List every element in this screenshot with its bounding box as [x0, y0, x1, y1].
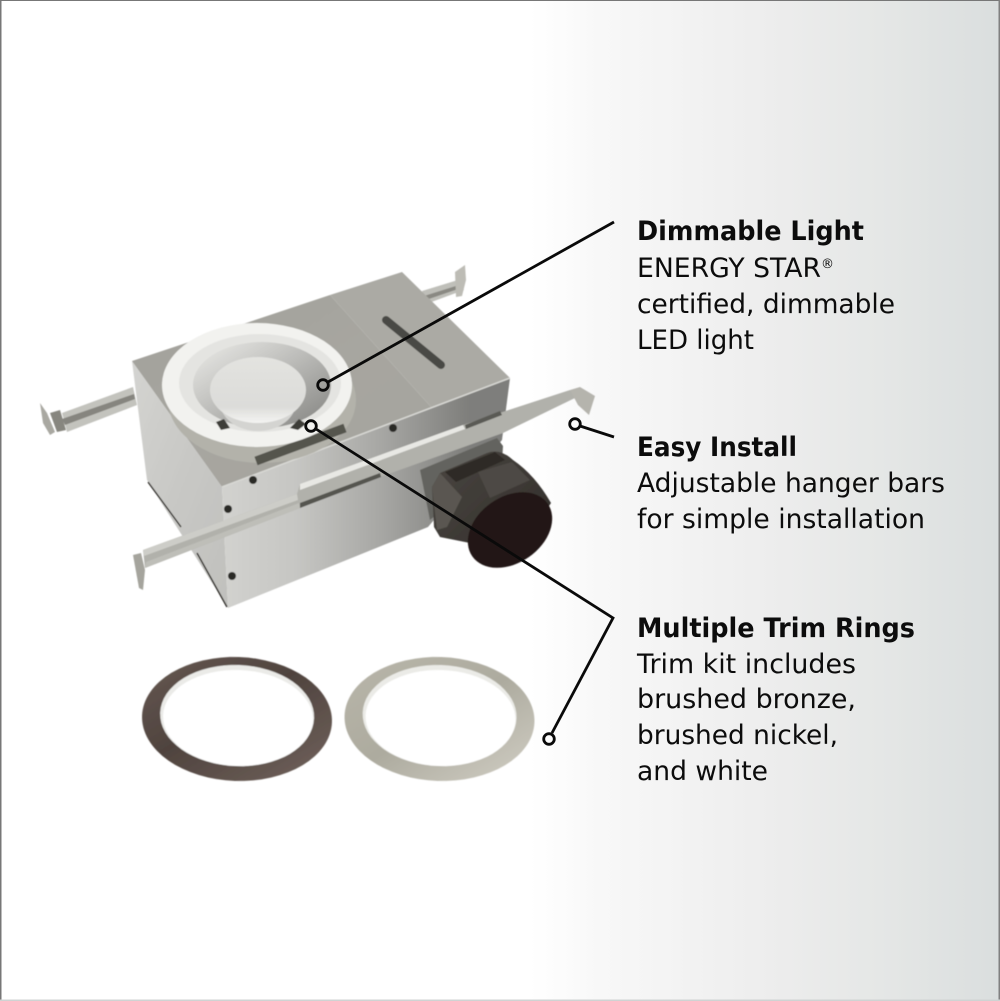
housing top face left	[132, 295, 432, 487]
mount disc beneath trim	[168, 337, 356, 463]
text block: dimmable light: ENERGY STAR	[637, 253, 821, 284]
white trim ring	[162, 323, 352, 447]
callout line: easy install	[570, 419, 614, 437]
LED bulb	[210, 357, 306, 423]
text block: dimmable light: LED light	[637, 325, 754, 356]
text block: multiple trim rings: brushed bronze,	[637, 684, 856, 715]
dark slot below trim	[256, 428, 345, 461]
callout line: trim rings from housing	[306, 421, 613, 744]
housing left face	[132, 361, 228, 608]
dark slot on top face	[386, 320, 441, 365]
text block: easy install	[637, 432, 945, 535]
product: recessed fan light housing	[40, 265, 595, 608]
housing bottom edges	[148, 482, 227, 607]
text block: dimmable light: ®	[821, 257, 834, 272]
text block: multiple trim rings: Multiple Trim Rings	[637, 613, 915, 644]
dark clips below LED	[216, 419, 230, 430]
ribbed baffle dish	[193, 342, 331, 428]
text block: easy install: Adjustable hanger bars	[637, 468, 945, 499]
text block: dimmable light: Dimmable Light	[637, 216, 864, 247]
inner wall of baffle	[179, 334, 341, 432]
shadow between front bar and duct	[420, 438, 503, 520]
housing front face	[222, 378, 510, 608]
rear right hanger bar	[422, 265, 466, 304]
housing top face right	[330, 272, 510, 408]
trim ring: brushed bronze	[140, 654, 334, 784]
rear left hanger bar	[40, 387, 137, 435]
text block: multiple trim rings: brushed nickel,	[637, 720, 838, 751]
black duct connector	[432, 452, 567, 583]
text block: dimmable light: certified, dimmable	[637, 289, 895, 320]
callout line: dimmable light	[318, 222, 614, 390]
text block: multiple trim rings: Trim kit includes	[636, 649, 856, 680]
LED base	[220, 373, 296, 431]
trim ring: brushed nickel	[342, 654, 537, 784]
text block: multiple trim rings: and white	[637, 756, 768, 787]
text block: easy install: Easy Install	[637, 432, 797, 463]
screws	[224, 424, 397, 580]
face highlight edge	[222, 378, 510, 487]
front hanger bar	[133, 387, 595, 590]
text block: dimmable light	[637, 216, 895, 356]
text block: multiple trim rings	[636, 613, 915, 787]
text block: easy install: for simple installation	[637, 504, 925, 535]
